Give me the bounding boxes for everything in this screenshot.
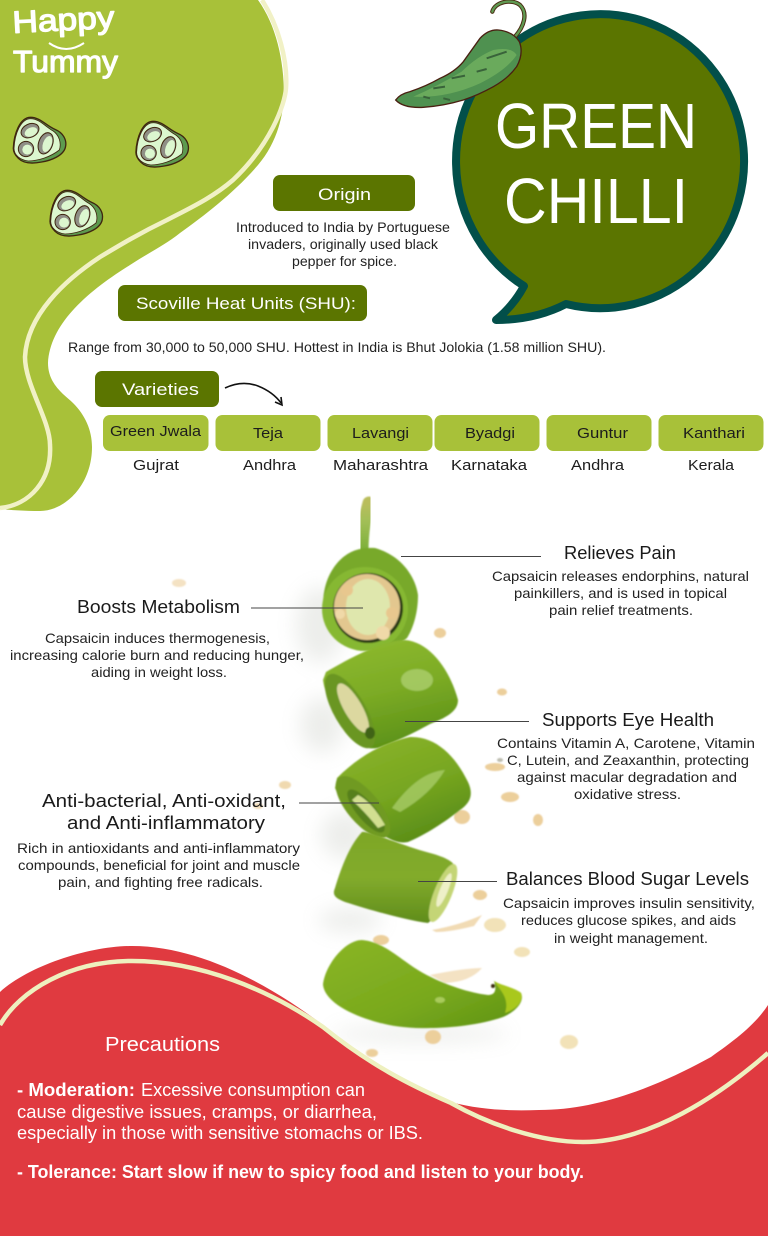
variety: Kanthari [658,415,764,474]
benefit: Anti-bacterial, Anti-oxidant, Anti-inflammatory: Anti-bacterial, Anti-oxidant, [42,791,286,811]
variety: Kanthari: Kanthari [683,425,745,442]
benefit: Supports Eye Health: C, Lutein, and Zeaxanthin, protecting [507,752,749,768]
benefit: Balances Blood Sugar Levels: in weight management. [554,930,708,946]
icon: chilli cross-section 2 [136,121,188,167]
benefit: Relieves Pain: Capsaicin releases endorphins, natural [492,568,749,584]
title: GREEN [495,90,697,162]
benefit: Anti-bacterial, Anti-oxidant, Anti-inflammatory: pain, and fighting free radicals. [58,874,263,890]
piece 1: open top with seeds [322,548,418,651]
title speech bubble [456,14,744,320]
logo: Happy Tummy: Happy [12,0,116,40]
benefit: Anti-bacterial, Anti-oxidant, Anti-inflammatory [17,791,379,890]
variety: Green Jwala: Gujrat [133,457,180,474]
text: SHU range: Range from 30,000 to 50,000 SHU. Hottest in India is Bhut Jolokia (1.58 million SHU). [68,339,606,355]
variety: Guntur: Andhra [571,457,625,474]
benefit: Boosts Metabolism: increasing calorie burn and reducing hunger, [10,647,304,663]
benefit: Boosts Metabolism: Boosts Metabolism [77,597,240,617]
variety: Kanthari: Kerala [688,457,735,474]
text: origin description [236,219,450,269]
benefit: Anti-bacterial, Anti-oxidant, Anti-inflammatory: compounds, beneficial for joint and muscle [18,857,300,873]
variety: Guntur: Guntur [577,425,628,442]
logo: Happy Tummy [12,0,118,79]
text: origin description: pepper for spice. [292,253,397,269]
benefit: Supports Eye Health: Supports Eye Health [542,710,714,730]
text: moderation: Excessive consumption can [141,1080,365,1100]
benefit: Relieves Pain: pain relief treatments. [549,602,693,618]
benefit: Supports Eye Health: oxidative stress. [574,786,681,802]
title [495,90,697,237]
chilli shadows [296,587,510,1042]
text: moderation: cause digestive issues, cramps, or diarrhea, [17,1102,377,1122]
heading: Varieties [95,371,219,407]
benefit: Relieves Pain: Relieves Pain [564,543,676,563]
variety: Teja: Teja [253,425,284,442]
chilli stem [362,503,369,552]
text: tolerance: - Tolerance: Start slow if new to spicy food and listen to your body. [17,1162,584,1182]
text: origin description: invaders, originally used black [248,236,439,252]
benefit: Supports Eye Health: Contains Vitamin A, Carotene, Vitamin [497,735,755,751]
text: moderation: especially in those with sensitive stomachs or IBS. [17,1123,423,1143]
benefit: Anti-bacterial, Anti-oxidant, Anti-inflammatory: Rich in antioxidants and anti-inflammatory [17,840,300,856]
variety: Teja: Andhra [243,457,297,474]
whole chilli tip [323,940,522,1028]
variety: Green Jwala [103,415,208,474]
benefit: Anti-bacterial, Anti-oxidant, Anti-inflammatory: and Anti-inflammatory [67,813,265,833]
icon: chilli cross-section 1 [13,117,66,163]
variety: Byadgi: Karnataka [451,457,528,474]
green blob top left [0,0,284,511]
heading: Scoville Heat Units: Scoville Heat Units (SHU): [136,294,356,313]
variety: Byadgi [434,415,540,474]
heading: Origin: Origin [318,185,371,204]
benefit: Balances Blood Sugar Levels: Balances Blood Sugar Levels [506,869,749,889]
scattered seeds [172,579,578,1057]
benefit: Relieves Pain: painkillers, and is used in topical [514,585,727,601]
benefit: Balances Blood Sugar Levels: Capsaicin improves insulin sensitivity, [503,895,755,911]
variety: Teja [216,415,320,474]
variety: Lavangi: Lavangi [352,425,409,442]
heading: Varieties: Varieties [122,380,199,399]
panel: precautions [0,946,768,1236]
heading: Precautions: Precautions [105,1034,220,1056]
benefit: Supports Eye Health: against macular degradation and [517,769,737,785]
variety: Guntur [546,415,652,474]
benefit: Balances Blood Sugar Levels [418,869,755,946]
benefit: Boosts Metabolism [10,597,363,680]
piece 2 [315,640,458,755]
piece 3 [326,737,471,846]
text: moderation [17,1080,423,1143]
heading: Origin [273,175,415,211]
arrow [225,383,282,405]
variety: Lavangi: Maharashtra [333,457,429,474]
benefit: Boosts Metabolism: Capsaicin induces thermogenesis, [45,630,270,646]
icon: chilli cross-section 3 [50,190,103,236]
benefit: Boosts Metabolism: aiding in weight loss. [91,664,227,680]
benefit: Balances Blood Sugar Levels: reduces glucose spikes, and aids [521,912,736,928]
variety: Green Jwala: Green Jwala [110,423,202,440]
text: origin description: Introduced to India by Portuguese [236,219,450,235]
icon: illustrated green chilli [396,2,524,107]
logo: Happy Tummy: Tummy [13,44,118,79]
heading: Scoville Heat Units [118,285,367,321]
title: CHILLI [504,165,688,237]
photo: sliced green chilli [172,503,578,1057]
piece 4 [334,832,463,925]
benefit: Supports Eye Health [405,710,755,802]
variety: Byadgi: Byadgi [465,425,515,442]
text: moderation: - Moderation: [17,1080,135,1100]
variety: Lavangi [328,415,432,474]
benefit: Relieves Pain [401,543,749,618]
